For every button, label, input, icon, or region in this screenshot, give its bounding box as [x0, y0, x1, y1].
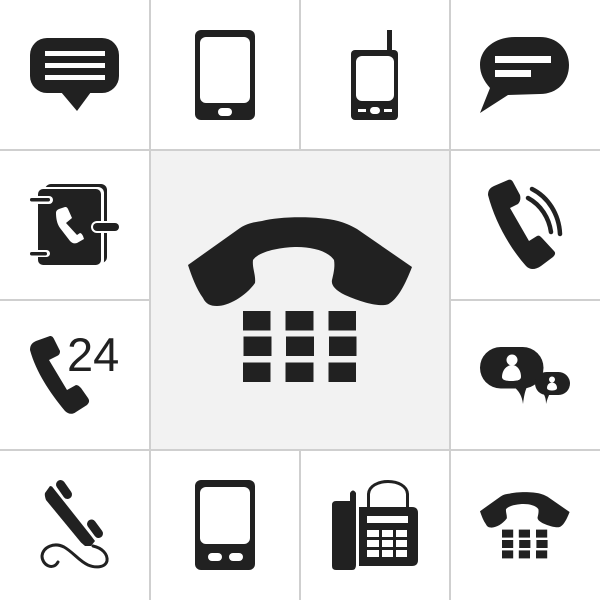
icon: phone book: [28, 184, 121, 267]
icon: smartphone with two buttons: [195, 480, 255, 570]
icon: large handset over keypad: [188, 217, 412, 382]
icon: small handset over keypad: [480, 492, 570, 558]
text: 24: 24: [67, 328, 119, 381]
icon: handset with sound waves: [488, 180, 560, 269]
icon: mobile phone with antenna: [351, 30, 398, 120]
icon: handset with curly cord: [42, 484, 107, 567]
icon: fax machine: [332, 482, 418, 570]
panel: centre highlighted tile: [150, 150, 450, 450]
icon: message bubble with three lines: [30, 38, 119, 111]
icon: chat bubbles with people: [480, 347, 570, 404]
icon: smartphone with one button: [195, 30, 255, 120]
icon: speech bubble with two lines: [480, 37, 569, 113]
icon: phone with 24: [30, 328, 119, 414]
